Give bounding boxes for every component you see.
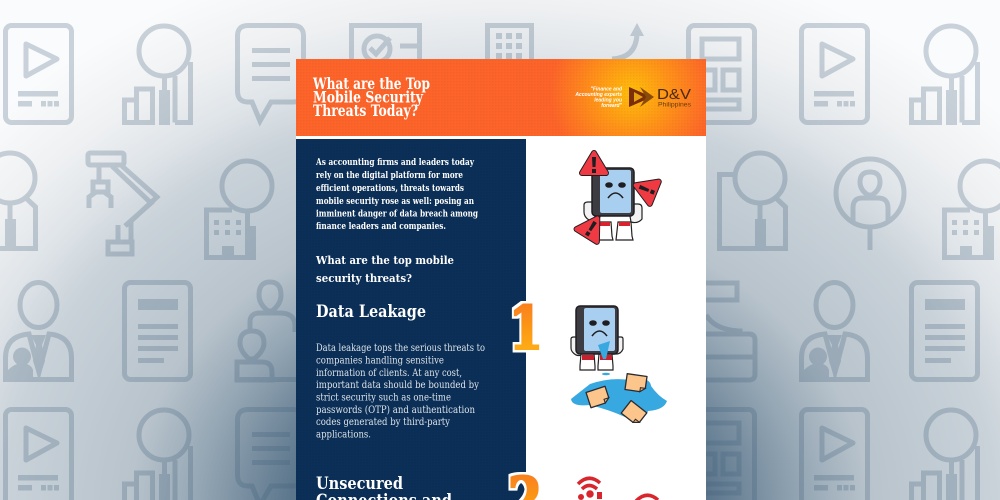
arms [571, 337, 623, 356]
tagline: "Finance and [590, 86, 623, 92]
illustration: sad phone with warning signs [577, 153, 659, 242]
number 1: 1 [509, 292, 543, 363]
icon: person in magnifier [836, 159, 904, 250]
leak [598, 341, 610, 359]
page white base [296, 59, 706, 500]
panel: navy text column [296, 139, 526, 500]
intro paragraph: imminent danger of data breach among [316, 208, 478, 220]
panel: infographic page [296, 59, 706, 500]
heading: Unsecured Connections and [316, 474, 452, 500]
illustration: leaking phone and folders [571, 306, 667, 425]
icon: magnifier chart row 4 right [912, 410, 978, 500]
illustration: red wifi signals [578, 478, 658, 500]
paragraph: data leakage: applications. [316, 430, 371, 440]
tagline: forward" [601, 103, 623, 109]
subheading [315, 253, 454, 285]
shoes [596, 222, 633, 240]
icon: magnifier building left [206, 161, 272, 260]
intro paragraph: finance leaders and companies. [316, 221, 446, 232]
logo: D&V Philippines: D&V [657, 87, 691, 103]
icon: robot arm [88, 153, 157, 254]
shoes [580, 354, 613, 370]
warning sign top [582, 153, 606, 173]
folder left [586, 386, 610, 408]
icon: play document row 1 [6, 26, 72, 122]
intro paragraph: As accounting firms and leaders today [315, 157, 475, 168]
icon: form document row 1 [688, 26, 754, 122]
icon: checklist document [352, 26, 420, 86]
intro paragraph: efficient operations, threats towards [316, 183, 464, 194]
title: Threats Today? [313, 101, 418, 120]
folder bottom [621, 401, 647, 425]
intro paragraph [315, 157, 478, 232]
logo: D&V Philippines [629, 87, 691, 108]
paragraph: data leakage: companies handling sensitive [316, 356, 444, 366]
warning sign right [631, 174, 659, 204]
icon: report document right [912, 282, 978, 380]
icon: businessperson right [802, 282, 868, 380]
title: What are the Top [312, 74, 430, 93]
panel: orange header [296, 59, 706, 136]
paragraph: data leakage: codes generated by third-party [316, 417, 450, 428]
title [312, 74, 430, 120]
paragraph: data leakage: important data should be bounded by [316, 380, 479, 391]
paragraph: data leakage: passwords (OTP) and authentication [316, 405, 475, 416]
icon: building [488, 26, 532, 86]
folder top [625, 374, 647, 392]
icon: magnifier chart row 1 right [912, 26, 978, 125]
icon: magnifier document left [0, 153, 36, 250]
tagline: leading you [594, 98, 622, 104]
drop [602, 373, 610, 375]
phone arms [584, 202, 642, 223]
icon: businessperson left [6, 282, 72, 380]
paragraph: data leakage [316, 343, 485, 440]
paragraph: data leakage: information of clients. At any cost, [316, 368, 462, 379]
title: Mobile Security [313, 88, 424, 106]
intro paragraph: mobile security rose as well: posing an [316, 196, 474, 207]
phone body [576, 306, 618, 354]
icon: hand on stack [706, 283, 755, 380]
puddle [571, 379, 667, 419]
icon: play document row 4 right [802, 410, 868, 500]
heading: Unsecured Connections and: Unsecured [316, 474, 403, 493]
heading: Data Leakage: Data Leakage [316, 302, 426, 321]
intro paragraph: rely on the digital platform for more [316, 170, 463, 181]
phone body [592, 168, 634, 216]
tagline [574, 86, 623, 109]
icon: play document row 4 [6, 410, 72, 500]
warning sign bottom [577, 212, 607, 242]
icon: play document row 1 right [802, 26, 868, 122]
icon: report document left [124, 282, 190, 380]
tagline: Accounting experts [574, 92, 622, 98]
paragraph: data leakage: strict security such as one-time [316, 392, 451, 404]
icon: magnifier chart row 1 [124, 26, 190, 125]
icon: group of people [237, 282, 300, 380]
icon: magnifier document right [720, 153, 786, 250]
icon: magnifier building right [944, 161, 1000, 260]
icon: upward arrow [612, 23, 644, 59]
paragraph: data leakage: Data leakage tops the serious threats to [316, 343, 485, 354]
logo: D&V Philippines: Philippines [658, 102, 691, 108]
subheading: security threats? [316, 271, 412, 285]
icon: speech bubble row 1 [238, 26, 304, 121]
subheading: What are the top mobile [315, 253, 454, 267]
icon: speech bubble row 4 [238, 410, 304, 500]
icon: form document row 4 [688, 410, 754, 500]
icon: magnifier chart row 4 [124, 410, 190, 500]
